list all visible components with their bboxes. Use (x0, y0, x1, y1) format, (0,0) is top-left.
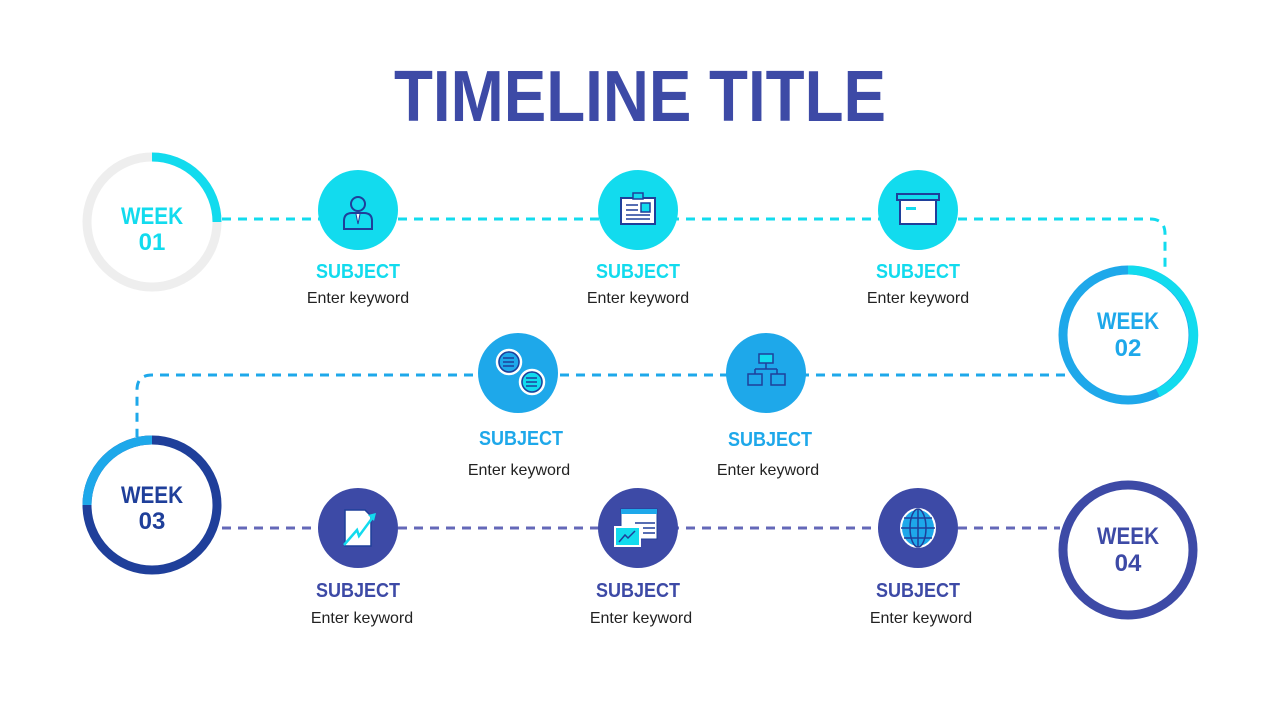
item 6: document with arrow: Enter keyword (311, 610, 413, 627)
item 4: chat bubbles: SUBJECT (479, 428, 563, 450)
item 5: org chart: Enter keyword (717, 462, 819, 479)
item 1: person (307, 170, 409, 307)
item 7: web chart (590, 488, 692, 627)
item 2: id card: Enter keyword (587, 290, 689, 307)
week 03 ring: 03 (139, 508, 165, 535)
item 7: web chart: Enter keyword (590, 610, 692, 627)
week 02 ring: WEEK (1097, 308, 1160, 335)
week 02 ring (1063, 270, 1194, 400)
item 5: org chart: SUBJECT (728, 429, 812, 451)
item 5: org chart (717, 333, 819, 479)
item 1: person: Enter keyword (307, 290, 409, 307)
item 1: person: SUBJECT (316, 261, 400, 283)
week 03 ring (87, 440, 217, 570)
item 8: globe (870, 488, 972, 627)
item 2: id card: SUBJECT (596, 261, 680, 283)
week 04 ring: 04 (1115, 550, 1142, 577)
week 01 ring: WEEK (121, 203, 184, 230)
item 8: globe: SUBJECT (876, 580, 960, 602)
item 6: document with arrow: SUBJECT (316, 580, 400, 602)
item 8: globe: Enter keyword (870, 610, 972, 627)
item 3: folder (867, 170, 969, 307)
title: TIMELINE TITLE (394, 57, 886, 137)
item 4: chat bubbles (468, 333, 570, 479)
week 03 ring: WEEK (121, 482, 184, 509)
connector: row 3 (222, 526, 1060, 530)
week 02 ring: 02 (1115, 335, 1141, 362)
week 04 ring: WEEK (1097, 523, 1160, 550)
item 2: id card (587, 170, 689, 307)
week 01 ring (87, 157, 217, 287)
connector: row 2 (137, 375, 1065, 437)
item 6: document with arrow (311, 488, 413, 627)
connector: row 1 (222, 219, 1165, 268)
item 3: folder: Enter keyword (867, 290, 969, 307)
week 01 ring: 01 (139, 229, 165, 256)
week 04 ring (1063, 485, 1193, 615)
item 7: web chart: SUBJECT (596, 580, 680, 602)
item 3: folder: SUBJECT (876, 261, 960, 283)
item 4: chat bubbles: Enter keyword (468, 462, 570, 479)
